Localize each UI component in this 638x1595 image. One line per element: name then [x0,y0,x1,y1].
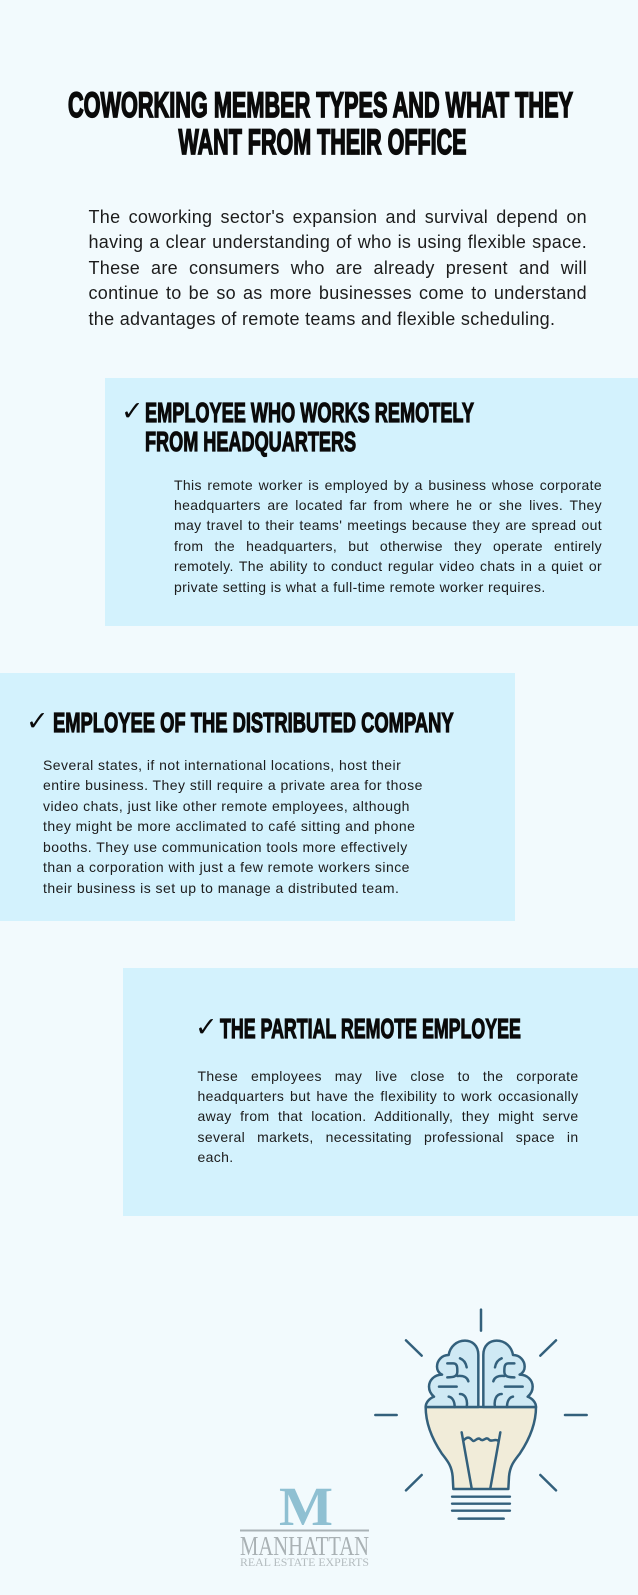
panel heading: THE PARTIAL REMOTE EMPLOYEE [220,1013,521,1044]
logo mark: M [279,1476,333,1537]
panel body text [43,756,423,896]
intro text: continue to be so as more businesses come to understand [88,283,587,303]
intro text: the advantages of remote teams and flexible scheduling. [88,309,555,329]
panel body text [198,1068,578,1165]
panel body text: video chats, just like other remote employees, although [43,798,410,814]
title [68,87,574,162]
panel heading: EMPLOYEE WHO WORKS REMOTELY [145,397,474,427]
panel body text: These employees may live close to the corporate [198,1068,578,1084]
panel body text: private setting is what a full-time remote worker requires. [174,578,546,594]
panel body text: headquarters are located far from where he or she lives. They [174,497,602,513]
logo [240,1476,369,1569]
title: COWORKING MEMBER TYPES AND WHAT THEY [68,87,573,125]
panel body text: booths. They use communication tools more effectively [43,838,408,854]
title: WANT FROM THEIR OFFICE [178,124,467,162]
panel body text: entire business. They still require a private area for those [43,777,423,793]
panel heading: FROM HEADQUARTERS [145,427,356,458]
panel heading: EMPLOYEE OF THE DISTRIBUTED COMPANY [53,708,454,739]
intro text [88,207,587,329]
panel: partial remote employee [123,968,638,1216]
check icon: ✓ [26,706,49,736]
icon: light bulb with brain [374,1308,588,1520]
panel body text [174,476,602,595]
check icon: ✓ [121,396,144,426]
panel body text: Several states, if not international locations, host their [43,756,401,772]
panel body text: than a corporation with just a few remote workers since [43,859,410,875]
panel heading [145,397,474,458]
panel body text: away from that location. Additionally, they might serve [198,1108,578,1124]
panel body text: their business is set up to manage a distributed team. [43,880,399,896]
logo tagline: REAL ESTATE EXPERTS [240,1555,369,1569]
intro text: having a clear understanding of who is using flexible space. [88,232,587,252]
intro text: The coworking sector's expansion and survival depend on [88,207,587,227]
panel body text: headquarters but have the flexibility to work occasionally [198,1088,578,1104]
panel body text: from the headquarters, but otherwise they operate entirely [174,538,602,554]
panel: distributed company [0,672,515,921]
check icon: ✓ [195,1012,218,1043]
panel body text: several markets, necessitating professional space in [198,1129,578,1145]
logo name: MANHATTAN [240,1531,369,1561]
panel: remote from headquarters [105,378,638,626]
panel body text: This remote worker is employed by a business whose corporate [174,476,602,492]
panel body text: each. [198,1149,234,1165]
intro text: These are consumers who are already present and will [88,258,587,278]
panel body text: may travel to their teams' meetings because they are spread out [174,517,602,533]
panel body text: they might be more acclimated to café sitting and phone [43,818,415,834]
logo divider [240,1530,369,1532]
panel body text: remotely. The ability to conduct regular video chats in a quiet or [174,558,602,574]
